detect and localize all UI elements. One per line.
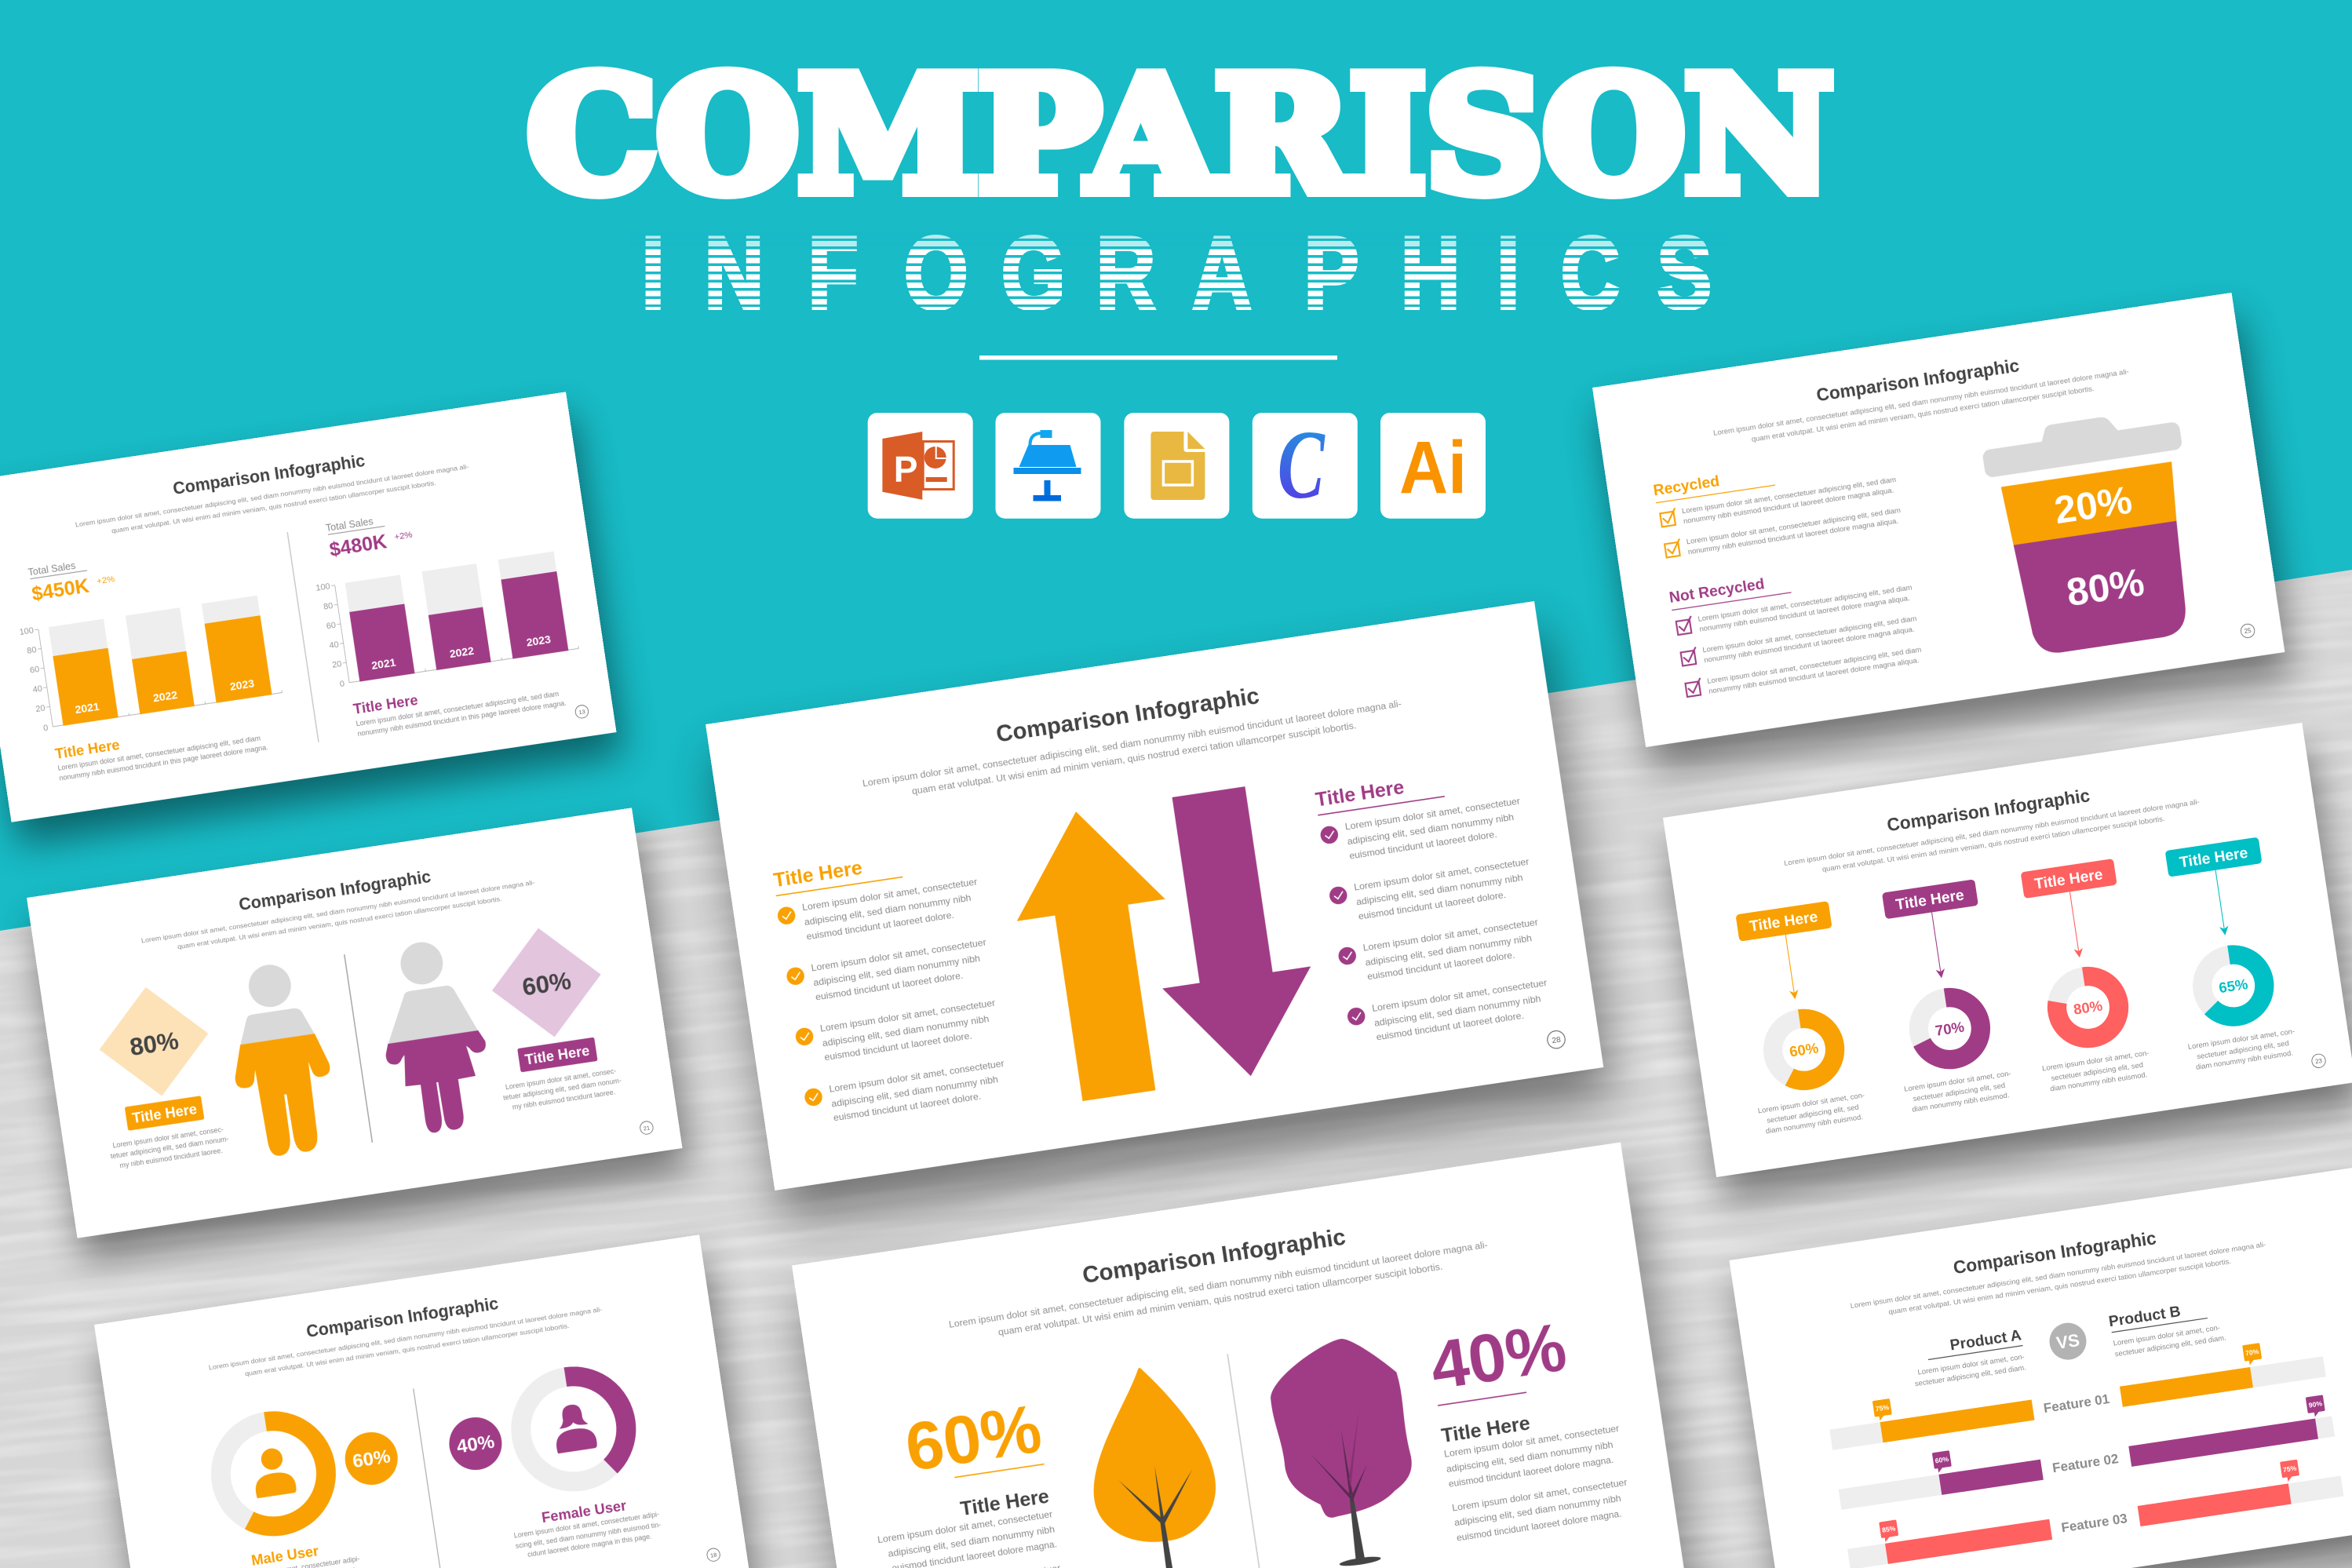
right checklist: euismod tincidunt ut laoreet dolore. bbox=[1348, 829, 1497, 861]
left bar chart: 0 bbox=[42, 724, 49, 734]
icon: orange tree bbox=[1076, 1359, 1237, 1568]
not recycled checklist: nonummy nibh euismod tincidunt ut laoreet dolore magna aliqua. bbox=[1708, 656, 1920, 695]
not recycled checklist: nonummy nibh euismod tincidunt ut laoreet dolore magna aliqua. bbox=[1704, 625, 1915, 664]
column 4: 65%: 65% bbox=[2218, 975, 2249, 996]
slide intro text: Lorem ipsum dolor sit amet, consectetuer adipiscing elit, sed diam nonummy nibh euismod tincidunt ut laoreet dolore magna ali- bbox=[1850, 1240, 2266, 1310]
recycled checklist: nonummy nibh euismod tincidunt ut laoreet dolore magna aliqua. bbox=[1687, 517, 1899, 556]
slide heading: Comparison Infographic bbox=[1081, 1223, 1347, 1289]
feature 02 row: 90% bbox=[2308, 1399, 2323, 1409]
feature 03 row: Feature 03 bbox=[2060, 1511, 2128, 1535]
female label bbox=[511, 1493, 663, 1560]
female label: cidunt laoreet dolore magna in this page. bbox=[527, 1533, 652, 1559]
icon: recycling bin: 20% bbox=[2051, 478, 2135, 532]
left checklist: euismod tincidunt ut laoreet dolore. bbox=[806, 910, 955, 942]
left bar chart: 2022 bbox=[152, 688, 178, 704]
slide intro text: quam erat volutpat. Ut wisi enim ad minim veniam, quis nostrud exerci tation ullamcorper suscipit lobortis. bbox=[177, 895, 502, 950]
panel: four donuts slide bbox=[1663, 723, 2352, 1177]
recycled checklist: nonummy nibh euismod tincidunt ut laoreet dolore magna aliqua. bbox=[1683, 487, 1894, 525]
product A heading bbox=[1909, 1326, 2026, 1387]
left text block: Lorem ipsum dolor sit amet, consectetuer bbox=[877, 1508, 1053, 1545]
left percentage: 60% bbox=[901, 1391, 1046, 1486]
male percentage badge: 60% bbox=[351, 1446, 392, 1472]
slide heading: Comparison Infographic bbox=[994, 683, 1261, 747]
right text block bbox=[1440, 1399, 1632, 1544]
right caption bbox=[352, 669, 567, 738]
column 2: 70%: Lorem ipsum dolor sit amet, con- bbox=[1904, 1070, 2011, 1093]
feature 01 row: 75% bbox=[1875, 1403, 1890, 1413]
left title tag: Title Here bbox=[131, 1100, 198, 1126]
right bar chart: 2022 bbox=[449, 644, 475, 660]
right checklist: euismod tincidunt ut laoreet dolore. bbox=[1358, 889, 1507, 922]
right checklist: Lorem ipsum dolor sit amet, consectetuer bbox=[1353, 856, 1530, 893]
right bar chart: 2021 bbox=[370, 655, 397, 672]
right total sales: Total Sales bbox=[325, 516, 374, 534]
not recycled heading: Not Recycled bbox=[1668, 575, 1766, 607]
column 3: 80%: sectetuer adipiscing elit, sed bbox=[2051, 1061, 2144, 1082]
left checklist: euismod tincidunt ut laoreet dolore. bbox=[815, 970, 964, 1002]
right text block: euismod tincidunt laoreet dolore magna. bbox=[1456, 1508, 1622, 1544]
left caption: Lorem ipsum dolor sit amet, consectetuer adipiscing elit, sed diam bbox=[57, 734, 261, 772]
right checklist: Lorem ipsum dolor sit amet, consectetuer bbox=[1362, 917, 1539, 954]
right bar chart: 2023 bbox=[526, 633, 552, 648]
right caption: Lorem ipsum dolor sit amet, consectetuer adipiscing elit, sed diam bbox=[356, 690, 560, 727]
column 4: 65%: diam nonummy nibh euismod. bbox=[2195, 1049, 2294, 1071]
slide intro text: quam erat volutpat. Ut wisi enim ad minim veniam, quis nostrud exerci tation ullamcorper suscipit lobortis. bbox=[997, 1262, 1443, 1338]
icon: purple tree bbox=[1264, 1331, 1426, 1568]
slide intro text: Lorem ipsum dolor sit amet, consectetuer adipiscing elit, sed diam nonummy nibh euismod tincidunt ut laoreet dolore magna ali- bbox=[862, 698, 1402, 789]
male donut chart bbox=[213, 1414, 334, 1533]
panel: male and female user slide bbox=[94, 1234, 750, 1568]
right checklist: euismod tincidunt ut laoreet dolore. bbox=[1376, 1010, 1525, 1043]
left description bbox=[108, 1125, 231, 1170]
icon: recycling bin bbox=[1979, 406, 2210, 659]
right description bbox=[501, 1067, 623, 1112]
left bar chart: 100 bbox=[19, 626, 35, 637]
main title: COMPARISON bbox=[527, 43, 1833, 228]
column 4: 65% bbox=[2159, 836, 2299, 1072]
VS badge: VS bbox=[2055, 1330, 2081, 1353]
right checklist: Lorem ipsum dolor sit amet, consectetuer bbox=[1344, 796, 1521, 833]
right checklist: adipiscing elit, sed diam nonummy nibh bbox=[1365, 932, 1533, 968]
right description: tetuer adipiscing elit, sed diam nonum- bbox=[503, 1077, 622, 1102]
icon: female user bbox=[551, 1402, 598, 1453]
right bar chart: 60 bbox=[326, 621, 337, 631]
right total sales bbox=[325, 510, 414, 561]
column 3: 80%: 80% bbox=[2073, 997, 2103, 1018]
page number bbox=[574, 705, 589, 719]
icon: recycling bin: 80% bbox=[2064, 560, 2147, 614]
icon: Canva bbox=[1253, 410, 1358, 520]
left checklist: Lorem ipsum dolor sit amet, consectetuer bbox=[819, 997, 996, 1034]
page number bbox=[2311, 1053, 2326, 1069]
left caption: Title Here bbox=[54, 736, 121, 762]
slide heading: Comparison Infographic bbox=[305, 1293, 500, 1341]
left bar chart: 20 bbox=[35, 703, 46, 714]
right bar chart: 40 bbox=[329, 640, 340, 651]
column 3: 80%: Title Here bbox=[2033, 866, 2104, 893]
slide intro text: Lorem ipsum dolor sit amet, consectetuer adipiscing elit, sed diam nonummy nibh euismod tincidunt ut laoreet dolore magna ali- bbox=[948, 1240, 1489, 1330]
feature 01 row: Feature 01 bbox=[2043, 1391, 2110, 1416]
slide intro text: Lorem ipsum dolor sit amet, consectetuer adipiscing elit, sed diam nonummy nibh euismod tincidunt ut laoreet dolore magna ali- bbox=[1784, 797, 2200, 867]
slide intro text: Lorem ipsum dolor sit amet, consectetuer adipiscing elit, sed diam nonummy nibh euismod tincidunt ut laoreet dolore magna ali- bbox=[140, 878, 535, 945]
left bar chart: 2023 bbox=[229, 676, 255, 693]
right text block: euismod tincidunt laoreet dolore magna. bbox=[1448, 1454, 1614, 1490]
left checklist: Lorem ipsum dolor sit amet, consectetuer bbox=[801, 876, 978, 913]
feature 03 row: 85% bbox=[1881, 1524, 1896, 1534]
left text block: Title Here bbox=[959, 1486, 1051, 1520]
left checklist: adipiscing elit, sed diam nonummy nibh bbox=[804, 892, 972, 928]
recycled heading bbox=[1652, 465, 1775, 503]
left percentage diamond: 80% bbox=[128, 1026, 181, 1061]
left checklist: euismod tincidunt ut laoreet dolore. bbox=[824, 1030, 973, 1063]
right column heading bbox=[1314, 771, 1445, 816]
right checklist: adipiscing elit, sed diam nonummy nibh bbox=[1373, 993, 1541, 1029]
left bar chart: 40 bbox=[32, 684, 43, 695]
icon: male figure bbox=[219, 958, 341, 1161]
product B heading: Lorem ipsum dolor sit amet, con- bbox=[2113, 1323, 2221, 1347]
column 1: 60%: 60% bbox=[1789, 1039, 1819, 1060]
right percentage diamond: 60% bbox=[520, 967, 573, 1001]
page number bbox=[640, 1121, 654, 1135]
female label: Lorem ipsum dolor sit amet, consectetuer adipi- bbox=[513, 1510, 660, 1540]
left description: tetuer adipiscing elit, sed diam nonum- bbox=[110, 1135, 229, 1160]
left caption: nonummy nibh euismod tincidunt in this page laoreet dolore magna. bbox=[59, 743, 268, 782]
slide intro text: quam erat volutpat. Ut wisi enim ad minim veniam, quis nostrud exerci tation ullamcorper suscipit lobortis. bbox=[111, 479, 436, 534]
male percentage badge bbox=[341, 1428, 401, 1489]
icon: Keynote bbox=[995, 413, 1100, 519]
product B heading: Product B bbox=[2107, 1303, 2182, 1330]
left checklist: adipiscing elit, sed diam nonummy nibh bbox=[812, 953, 981, 988]
right text block: Title Here bbox=[1440, 1412, 1532, 1447]
icon: PowerPoint bbox=[868, 413, 973, 519]
left total sales: $450K bbox=[31, 574, 90, 605]
male label: Male User bbox=[250, 1542, 319, 1568]
subtitle: striped INFOGRAPHICS: INFOGRAPHICS bbox=[642, 217, 1712, 331]
icon: male user bbox=[250, 1446, 297, 1498]
right bar chart: 80 bbox=[323, 601, 334, 612]
icon: female figure bbox=[370, 935, 498, 1138]
left checklist: adipiscing elit, sed diam nonummy nibh bbox=[822, 1013, 990, 1049]
feature 01 row: 70% bbox=[2244, 1347, 2259, 1357]
right total sales: +2% bbox=[394, 530, 413, 542]
right bar chart: 0 bbox=[339, 680, 345, 689]
left bar chart: 60 bbox=[29, 665, 40, 676]
not recycled checklist: Lorem ipsum dolor sit amet, consectetuer adipiscing elit, sed diam bbox=[1707, 645, 1922, 685]
recycled checklist: Lorem ipsum dolor sit amet, consectetuer adipiscing elit, sed diam bbox=[1686, 506, 1902, 545]
right checklist: euismod tincidunt ut laoreet dolore. bbox=[1366, 950, 1515, 983]
page number: 13 bbox=[578, 708, 585, 717]
slide intro text: quam erat volutpat. Ut wisi enim ad minim veniam, quis nostrud exerci tation ullamcorper suscipit lobortis. bbox=[911, 720, 1357, 797]
right total sales: $480K bbox=[328, 531, 388, 561]
left percentage diamond bbox=[91, 979, 217, 1104]
slide heading: Comparison Infographic bbox=[1886, 785, 2091, 835]
slide intro text: quam erat volutpat. Ut wisi enim ad minim veniam, quis nostrud exerci tation ullamcorper suscipit lobortis. bbox=[1751, 385, 2095, 443]
icon: Canva: C bbox=[1278, 410, 1326, 520]
slide heading: Comparison Infographic bbox=[1952, 1227, 2157, 1278]
slide intro text: quam erat volutpat. Ut wisi enim ad minim veniam, quis nostrud exerci tation ullamcorper suscipit lobortis. bbox=[1888, 1257, 2232, 1316]
left bar chart: 2021 bbox=[74, 700, 100, 716]
right percentage: 40% bbox=[1426, 1310, 1571, 1404]
column 2: 70%: 70% bbox=[1934, 1019, 1965, 1039]
right caption: nonummy nibh euismod tincidunt in this page laoreet dolore magna. bbox=[357, 699, 567, 738]
product B heading bbox=[2107, 1296, 2226, 1358]
VS badge bbox=[2047, 1320, 2089, 1362]
right bar chart: 100 bbox=[315, 582, 331, 593]
left title tag bbox=[125, 1096, 204, 1131]
right text block: Lorem ipsum dolor sit amet, consectetuer bbox=[1443, 1423, 1620, 1460]
left caption bbox=[54, 715, 268, 782]
right checklist: Lorem ipsum dolor sit amet, consectetuer bbox=[1371, 977, 1548, 1014]
feature 03 row: 75% bbox=[2282, 1464, 2297, 1474]
feature 02 row: Feature 02 bbox=[2051, 1451, 2120, 1475]
right description: my nibh euismod tincidunt laoree. bbox=[512, 1088, 616, 1111]
left total sales: Total Sales bbox=[27, 560, 76, 578]
not recycled checklist bbox=[1676, 583, 1924, 698]
right checklist bbox=[1319, 796, 1552, 1047]
column 1: 60% bbox=[1729, 900, 1869, 1136]
column 2: 70%: diam nonummy nibh euismod. bbox=[1912, 1091, 2010, 1114]
panel: product comparison slide bbox=[1730, 1165, 2352, 1568]
feature 02 row bbox=[1835, 1394, 2335, 1510]
not recycled checklist: Lorem ipsum dolor sit amet, consectetuer adipiscing elit, sed diam bbox=[1702, 614, 1917, 654]
left checklist: Lorem ipsum dolor sit amet, consectetuer bbox=[829, 1058, 1005, 1095]
female percentage badge: 40% bbox=[455, 1431, 496, 1457]
female label: scing elit, sed diam nonummy nibh euismod tin- bbox=[515, 1520, 662, 1550]
left bar chart bbox=[19, 591, 283, 735]
right text block: adipiscing elit, sed diam nonummy nibh bbox=[1446, 1439, 1614, 1475]
page number: 25 bbox=[2244, 627, 2252, 635]
page number: 28 bbox=[1552, 1036, 1562, 1045]
icon: Illustrator: Ai bbox=[1399, 426, 1467, 509]
right text block: Lorem ipsum dolor sit amet, consectetuer bbox=[1451, 1477, 1628, 1513]
slide heading: Comparison Infographic bbox=[1815, 355, 2021, 405]
left column heading: Title Here bbox=[772, 857, 864, 892]
right checklist: adipiscing elit, sed diam nonummy nibh bbox=[1347, 811, 1515, 848]
left checklist: Lorem ipsum dolor sit amet, consectetuer bbox=[811, 936, 987, 973]
panel: gender figures slide bbox=[27, 808, 683, 1238]
slide intro text: quam erat volutpat. Ut wisi enim ad minim veniam, quis nostrud exerci tation ullamcorper suscipit lobortis. bbox=[1821, 815, 2165, 873]
left text block: adipiscing elit, sed diam nonummy nibh bbox=[888, 1523, 1056, 1559]
column 2: 70%: sectetuer adipiscing elit, sed bbox=[1913, 1081, 2006, 1103]
column 4: 65%: Title Here bbox=[2179, 844, 2249, 871]
left description: Lorem ipsum dolor sit amet, consec- bbox=[112, 1125, 224, 1150]
column 1: 60%: sectetuer adipiscing elit, sed bbox=[1767, 1103, 1859, 1125]
arrow: up bbox=[1002, 800, 1193, 1107]
column 1: 60%: Title Here bbox=[1749, 908, 1819, 935]
title divider bbox=[979, 356, 1337, 359]
product A heading: Product A bbox=[1949, 1326, 2022, 1354]
column 4: 65%: Lorem ipsum dolor sit amet, con- bbox=[2187, 1027, 2295, 1051]
right description: Lorem ipsum dolor sit amet, consec- bbox=[505, 1067, 617, 1091]
recycled checklist bbox=[1660, 475, 1903, 559]
left text block bbox=[873, 1485, 1061, 1568]
product B heading: sectetuer adipiscing elit, sed diam. bbox=[2114, 1333, 2226, 1358]
not recycled checklist: nonummy nibh euismod tincidunt ut laoreet dolore magna aliqua. bbox=[1699, 594, 1910, 633]
right percentage diamond bbox=[484, 920, 609, 1045]
right title tag bbox=[517, 1037, 598, 1072]
not recycled checklist: Lorem ipsum dolor sit amet, consectetuer adipiscing elit, sed diam bbox=[1697, 583, 1913, 623]
product A heading: sectetuer adipiscing elit, sed diam. bbox=[1914, 1363, 2026, 1387]
left checklist: adipiscing elit, sed diam nonummy nibh bbox=[830, 1074, 999, 1110]
column 2: 70%: Title Here bbox=[1894, 886, 1965, 913]
right bar chart: 20 bbox=[331, 659, 342, 670]
slide intro text: Lorem ipsum dolor sit amet, consectetuer adipiscing elit, sed diam nonummy nibh euismod tincidunt ut laoreet dolore magna ali- bbox=[208, 1305, 603, 1372]
column 1: 60%: diam nonummy nibh euismod. bbox=[1765, 1113, 1863, 1135]
column 1: 60%: Lorem ipsum dolor sit amet, con- bbox=[1757, 1091, 1865, 1114]
icon: Illustrator bbox=[1380, 413, 1486, 519]
column 3: 80% bbox=[2013, 858, 2153, 1093]
page number: 23 bbox=[2315, 1057, 2323, 1065]
column 3: 80%: diam nonummy nibh euismod. bbox=[2050, 1070, 2148, 1093]
page number: 18 bbox=[709, 1552, 717, 1559]
recycled checklist: Lorem ipsum dolor sit amet, consectetuer adipiscing elit, sed diam bbox=[1681, 476, 1897, 515]
software icons bbox=[868, 410, 1486, 520]
column 2: 70% bbox=[1875, 878, 2015, 1114]
right checklist: adipiscing elit, sed diam nonummy nibh bbox=[1355, 872, 1523, 908]
male label bbox=[211, 1537, 363, 1568]
icon: PowerPoint: P bbox=[894, 449, 917, 490]
not recycled heading bbox=[1668, 572, 1792, 611]
left total sales bbox=[27, 555, 117, 605]
panel: trees slide bbox=[792, 1143, 1690, 1568]
page number: 21 bbox=[643, 1125, 651, 1132]
slide intro text: Lorem ipsum dolor sit amet, consectetuer adipiscing elit, sed diam nonummy nibh euismod tincidunt ut laoreet dolore magna ali- bbox=[1713, 367, 2129, 437]
page number bbox=[1546, 1030, 1566, 1049]
icon: Google Slides bbox=[1124, 413, 1229, 519]
slide heading: Comparison Infographic bbox=[238, 866, 432, 914]
right column heading: Title Here bbox=[1314, 776, 1406, 811]
column 4: 65%: sectetuer adipiscing elit, sed bbox=[2197, 1039, 2289, 1060]
right title tag: Title Here bbox=[523, 1042, 591, 1068]
female percentage badge bbox=[446, 1413, 505, 1474]
right bar chart bbox=[315, 547, 579, 691]
feature 01 row bbox=[1826, 1334, 2326, 1450]
female label: Female User bbox=[541, 1497, 627, 1526]
left description: my nibh euismod tincidunt laoree. bbox=[119, 1147, 223, 1169]
panel: recycling bin slide bbox=[1592, 293, 2285, 747]
slide intro text: quam erat volutpat. Ut wisi enim ad minim veniam, quis nostrud exerci tation ullamcorper suscipit lobortis. bbox=[244, 1322, 570, 1377]
feature 02 row: 60% bbox=[1934, 1455, 1949, 1464]
left column heading bbox=[772, 851, 903, 896]
left checklist bbox=[776, 876, 1009, 1127]
left bar chart: 80 bbox=[27, 645, 37, 656]
page number bbox=[706, 1548, 720, 1562]
panel: sales bar charts slide bbox=[0, 392, 617, 822]
female donut chart bbox=[514, 1369, 633, 1489]
right text block: adipiscing elit, sed diam nonummy nibh bbox=[1453, 1493, 1622, 1529]
slide heading: Comparison Infographic bbox=[172, 450, 366, 498]
column 3: 80%: Lorem ipsum dolor sit amet, con- bbox=[2042, 1048, 2150, 1073]
page number bbox=[2240, 623, 2255, 639]
product A heading: Lorem ipsum dolor sit amet, con- bbox=[1917, 1353, 2025, 1377]
recycled heading: Recycled bbox=[1652, 472, 1720, 499]
panel: up and down arrows slide bbox=[706, 601, 1603, 1191]
left total sales: +2% bbox=[97, 574, 115, 586]
arrow: down bbox=[1135, 781, 1326, 1087]
left checklist: euismod tincidunt ut laoreet dolore. bbox=[833, 1091, 982, 1124]
slide intro text: Lorem ipsum dolor sit amet, consectetuer adipiscing elit, sed diam nonummy nibh euismod tincidunt ut laoreet dolore magna ali- bbox=[75, 462, 469, 529]
right caption: Title Here bbox=[352, 691, 419, 717]
feature 03 row bbox=[1844, 1453, 2343, 1568]
